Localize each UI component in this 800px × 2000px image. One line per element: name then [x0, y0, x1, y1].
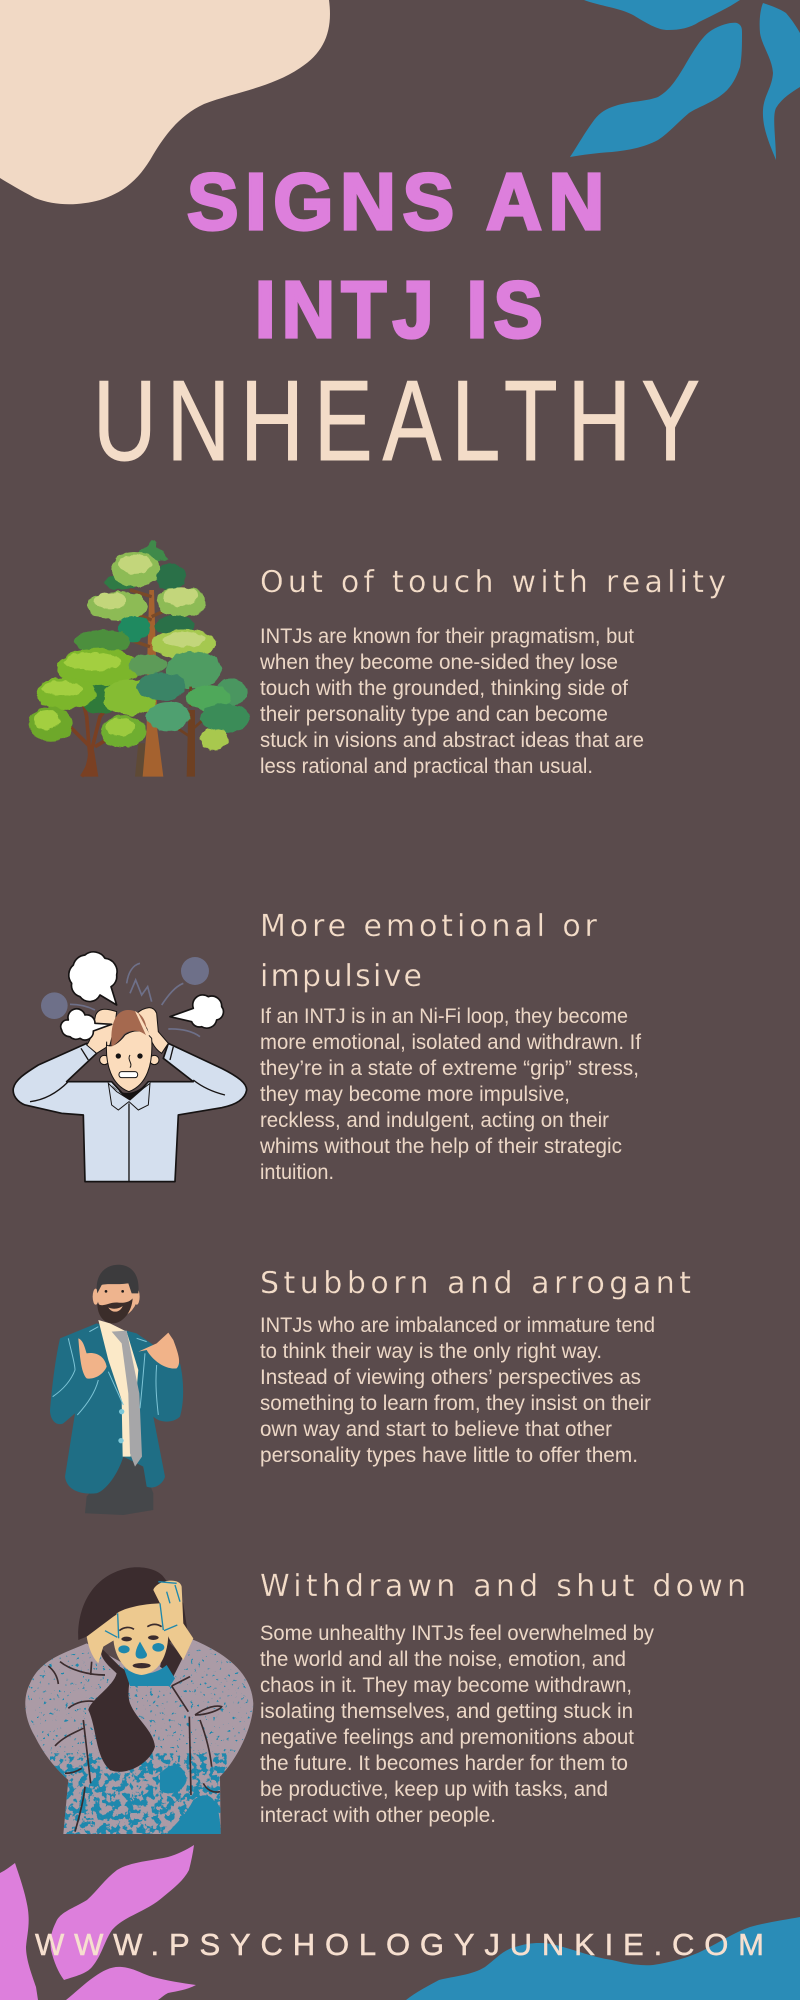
heading: out of touch with reality: Out of touch with reality — [260, 565, 726, 600]
heading: more emotional or: More emotional or — [260, 909, 598, 944]
decoration: pink leaves bottom left — [0, 1845, 196, 2000]
panel: withdrawn and shut down — [25, 1567, 746, 1834]
panel: more emotional or impulsive — [13, 909, 641, 1184]
text block: section 4: isolating themselves, and getting stuck in — [260, 1699, 633, 1723]
text block: section 3: personality types have little to offer them. — [260, 1443, 638, 1467]
text block: section 2: they may become more impulsive, — [260, 1082, 570, 1106]
text block: section 4 — [260, 1621, 654, 1827]
title: signs an: SIGNS AN — [187, 157, 611, 246]
text block: section 2: reckless, and indulgent, acting on their — [260, 1108, 609, 1132]
heading: impulsive: impulsive — [260, 959, 422, 994]
text block: section 1 — [259, 624, 644, 778]
decoration: blue leaves top right — [570, 0, 800, 160]
footer: website url: WWW.PSYCHOLOGYJUNKIE.COM — [35, 1927, 764, 1962]
text block: section 4: interact with other people. — [260, 1803, 496, 1827]
text block: section 2: they’re in a state of extreme “grip” stress, — [260, 1056, 639, 1080]
icon: trees — [29, 539, 250, 777]
decoration: blue blob bottom right — [406, 1917, 800, 2000]
panel: out of touch with reality — [29, 539, 726, 778]
text block: section 1: when they become one-sided they lose — [259, 650, 618, 674]
text block: section 3: to think their way is the only right way. — [260, 1339, 602, 1363]
heading: stubborn and arrogant: Stubborn and arrogant — [260, 1266, 691, 1301]
text block: section 2: intuition. — [260, 1160, 334, 1184]
title: intj is: INTJ IS — [255, 265, 549, 354]
decoration: peach blob top left — [0, 0, 330, 204]
text block: section 2: more emotional, isolated and withdrawn. If — [260, 1030, 641, 1054]
text block: section 3: Instead of viewing others’ perspectives as — [260, 1365, 641, 1389]
text block: section 2: If an INTJ is in an Ni-Fi loop, they become — [260, 1004, 628, 1028]
text block: section 2: whims without the help of their strategic — [259, 1134, 622, 1158]
text block: section 3: something to learn from, they insist on their — [260, 1391, 651, 1415]
panel: stubborn and arrogant — [50, 1265, 691, 1515]
text block: section 4: chaos in it. They may become withdrawn, — [260, 1673, 632, 1697]
icon: overwhelmed woman — [25, 1567, 255, 1834]
text block: section 3: INTJs who are imbalanced or immature tend — [260, 1313, 655, 1337]
text block: section 3: own way and start to believe that other — [260, 1417, 612, 1441]
text block: section 4: Some unhealthy INTJs feel overwhelmed by — [260, 1621, 654, 1645]
text block: section 1: their personality type and can become — [260, 702, 608, 726]
text block: section 4: negative feelings and premonitions about — [260, 1725, 634, 1749]
text block: section 1: INTJs are known for their pragmatism, but — [260, 624, 634, 648]
text block: section 1: less rational and practical than usual. — [260, 754, 593, 778]
text block: section 4: the world and all the noise, emotion, and — [260, 1647, 626, 1671]
text block: section 1: touch with the grounded, thinking side of — [260, 676, 628, 700]
heading: withdrawn and shut down: Withdrawn and shut down — [260, 1569, 746, 1604]
text block: section 1: stuck in visions and abstract ideas that are — [260, 728, 644, 752]
text block: section 4: the future. It becomes harder for them to — [260, 1751, 628, 1775]
text block: section 3 — [260, 1313, 655, 1467]
text block: section 2 — [259, 1004, 641, 1184]
icon: man in teal suit — [50, 1265, 183, 1515]
text block: section 4: be productive, keep up with tasks, and — [260, 1777, 608, 1801]
icon: stressed man — [13, 952, 247, 1182]
